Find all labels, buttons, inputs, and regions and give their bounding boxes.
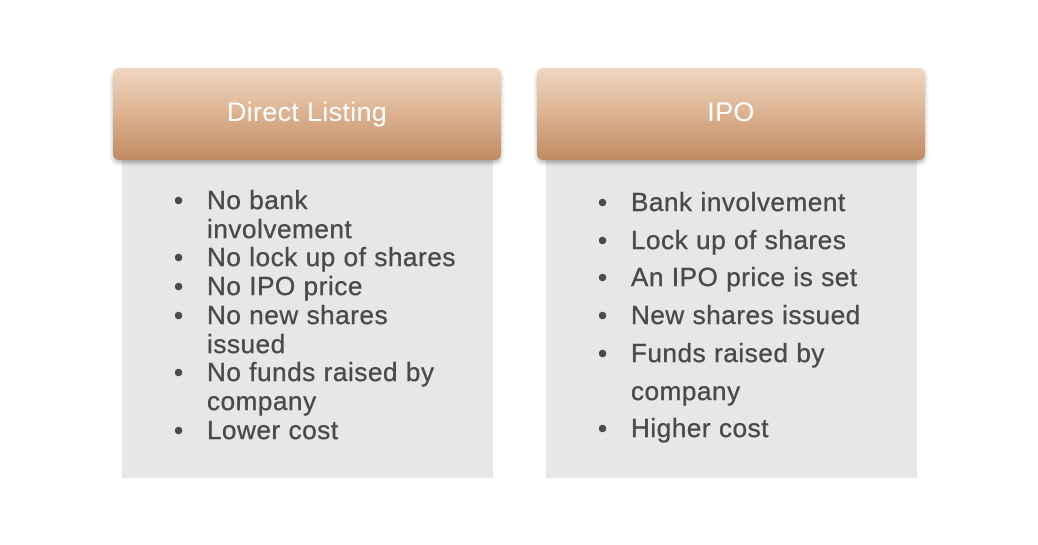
- body: IPO: •: [598, 262, 608, 292]
- list: IPO: An IPO price is set: [631, 262, 858, 292]
- body: direct listing: •: [174, 185, 184, 215]
- list: IPO: company: [631, 376, 741, 406]
- heading: direct listing: [113, 68, 501, 160]
- list: direct listing: No new shares: [207, 300, 388, 330]
- heading: direct listing: Direct Listing: [227, 97, 387, 127]
- list: IPO: Bank involvement: [631, 187, 846, 217]
- list: IPO: Funds raised by: [631, 338, 825, 368]
- list: direct listing: involvement: [207, 214, 352, 244]
- list: IPO: Lock up of shares: [631, 225, 846, 255]
- body: direct listing: •: [174, 271, 184, 301]
- body: direct listing: •: [174, 357, 184, 387]
- body: direct listing: •: [174, 300, 184, 330]
- list: direct listing: No bank: [207, 185, 308, 215]
- body: direct listing: •: [174, 415, 184, 445]
- body: IPO: •: [598, 225, 608, 255]
- body: direct listing: [122, 160, 493, 478]
- body: IPO: •: [598, 413, 608, 443]
- body: IPO: •: [598, 300, 608, 330]
- list: direct listing: Lower cost: [207, 415, 339, 445]
- list: IPO: Higher cost: [631, 413, 769, 443]
- list: direct listing: No funds raised by: [207, 357, 435, 387]
- list: IPO: New shares issued: [631, 300, 861, 330]
- panel: direct listing: [110, 68, 504, 478]
- list: direct listing: [174, 185, 456, 445]
- list: direct listing: No lock up of shares: [207, 242, 456, 272]
- heading: IPO: [537, 68, 925, 160]
- heading: IPO: IPO: [707, 97, 755, 127]
- list: IPO: [598, 187, 861, 443]
- list: direct listing: No IPO price: [207, 271, 363, 301]
- list: direct listing: company: [207, 386, 317, 416]
- panel: IPO: [534, 68, 928, 478]
- list: direct listing: issued: [207, 329, 286, 359]
- body: IPO: •: [598, 338, 608, 368]
- body: IPO: •: [598, 187, 608, 217]
- body: direct listing: •: [174, 242, 184, 272]
- body: IPO: [546, 160, 917, 478]
